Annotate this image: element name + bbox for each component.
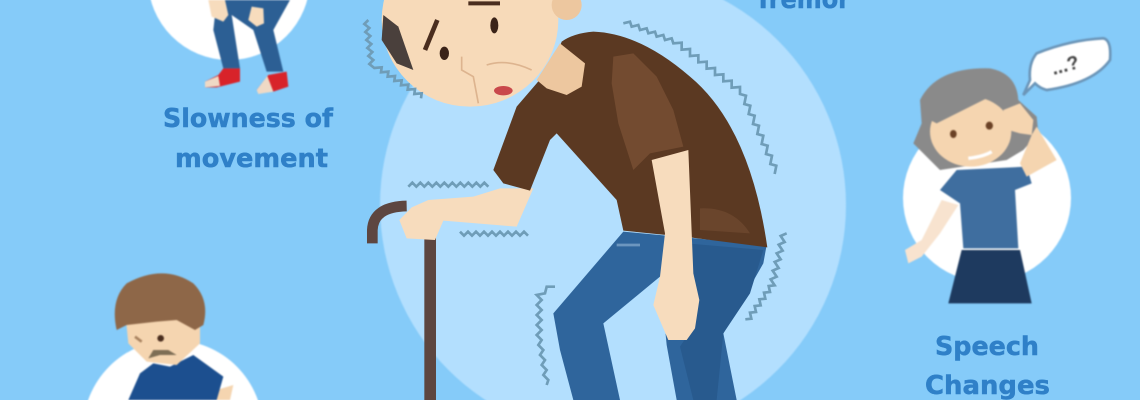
panel: speech changes (903, 38, 1110, 303)
figure legs (205, 0, 290, 94)
figure: elderly man with cane (364, 0, 787, 400)
label: slowness of movement: Slowness of (163, 104, 334, 134)
front arm and hand (652, 150, 699, 340)
icon: cane (372, 206, 436, 400)
speech bubble (1023, 38, 1110, 95)
white circle (903, 114, 1071, 282)
jeans (553, 232, 767, 400)
head (382, 0, 582, 107)
brown shirt (493, 32, 767, 247)
boy figure (115, 273, 233, 400)
panel: slowness of movement (148, 0, 310, 94)
back arm and hand (399, 188, 533, 240)
panel: boy with dark shirt (83, 273, 263, 400)
neck (537, 43, 585, 95)
white circle (148, 0, 310, 60)
tremor squiggles (364, 20, 787, 385)
label: slowness of movement (163, 104, 334, 174)
woman figure (905, 38, 1110, 303)
white circle (83, 340, 263, 400)
label: slowness of movement: movement (175, 144, 328, 174)
panel: central circle (380, 0, 846, 400)
label: speech changes (925, 332, 1050, 400)
speech bubble: ...? (1049, 52, 1082, 80)
label: speech changes: Speech (935, 332, 1039, 362)
